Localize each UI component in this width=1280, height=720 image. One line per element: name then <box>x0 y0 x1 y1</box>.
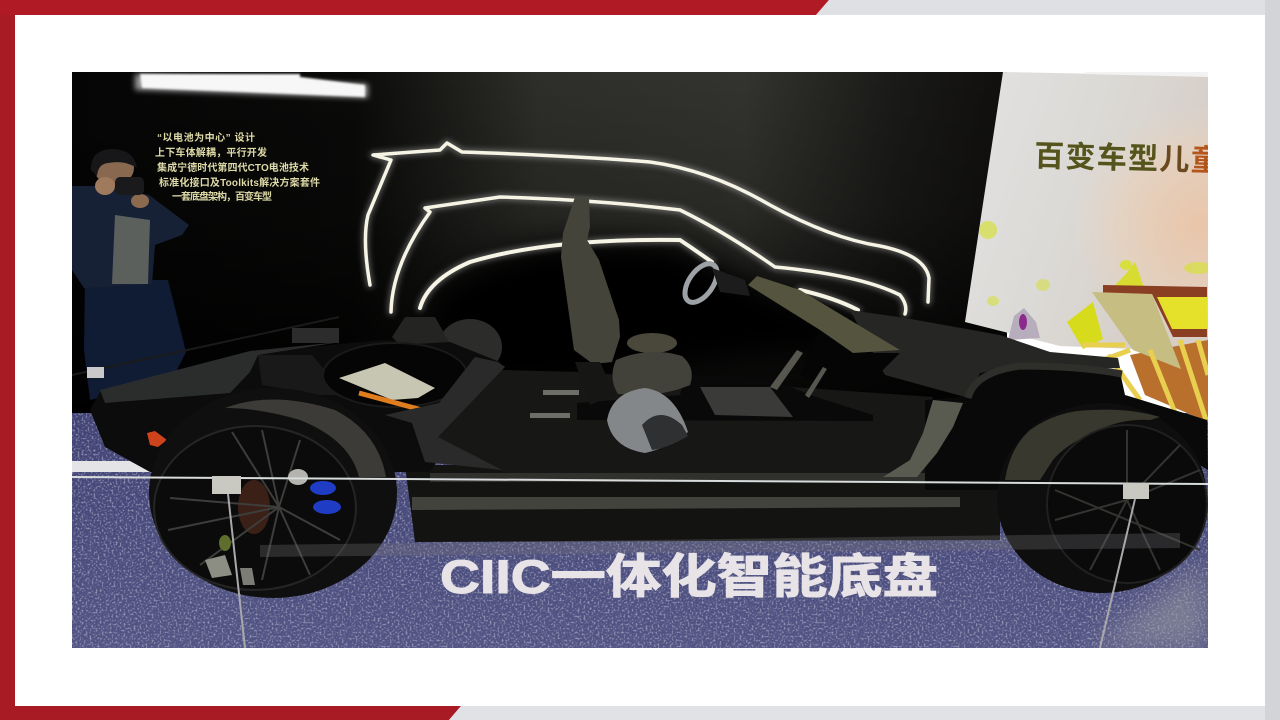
pedal brackets <box>770 350 827 398</box>
far rear wheel <box>443 319 502 361</box>
rim <box>1047 425 1207 583</box>
fender top <box>968 366 1122 398</box>
wall shading <box>360 190 1007 400</box>
spokes <box>168 430 340 580</box>
exhibition back wall <box>72 72 1007 422</box>
tyre <box>997 403 1207 593</box>
grey side trim <box>883 400 963 477</box>
floor mat <box>438 370 933 473</box>
seat back <box>561 197 620 364</box>
wall caption: 一套底盘架构，百变车型 <box>172 190 272 203</box>
white floor strip <box>72 461 152 472</box>
glass clamp left <box>212 476 241 494</box>
helmet <box>607 388 688 453</box>
dashboard <box>748 276 900 353</box>
side rail highlight <box>412 497 960 510</box>
banner paint splashes <box>979 221 1212 349</box>
seat cushion rear <box>627 333 677 353</box>
frame: right grey bar <box>1265 0 1280 720</box>
front wheel arch <box>940 365 1208 480</box>
tyre <box>149 388 397 598</box>
legs <box>84 280 186 400</box>
hands <box>95 177 115 195</box>
painting canvas <box>1157 297 1207 329</box>
rear wheel <box>149 388 397 598</box>
steering wheel <box>679 258 750 308</box>
floor tray base <box>577 375 873 421</box>
battery module <box>339 363 435 400</box>
front hood <box>850 310 1120 397</box>
banner peach glow <box>1106 137 1208 314</box>
easel board <box>1092 292 1181 369</box>
seat cushion <box>612 352 692 395</box>
wheel reflections <box>205 535 255 585</box>
front wheel <box>997 403 1207 593</box>
dark area inside the sedan outline <box>442 230 820 370</box>
seat bracket <box>575 362 615 405</box>
jacket <box>72 186 189 288</box>
wall caption: “以电池为中心” 设计 <box>157 131 255 144</box>
painting frame <box>1103 285 1207 337</box>
shirt <box>112 215 150 284</box>
chassis <box>72 276 1208 542</box>
blue calipers <box>310 481 341 514</box>
seat rails <box>530 390 579 418</box>
rear deck <box>100 342 340 403</box>
orange cable <box>359 393 422 410</box>
dark underbody <box>405 465 1000 542</box>
wall caption: 上下车体解耦，平行开发 <box>155 146 267 159</box>
rear glass clamp <box>87 367 104 378</box>
silver hub <box>288 469 308 485</box>
photographer reflection <box>72 149 189 400</box>
tyre tread <box>225 399 386 477</box>
chassis title on glass: CIIC一体化智能底盘 <box>440 550 938 603</box>
banner top white edge <box>1085 72 1208 77</box>
glowing outline: sedan <box>420 240 858 310</box>
banner heading: 百变车型儿童 <box>1034 140 1222 178</box>
dashboard underside <box>800 330 900 390</box>
easel and painting <box>1082 285 1208 422</box>
brake disc <box>238 480 270 534</box>
glass clamp right <box>1123 483 1149 499</box>
easel legs <box>1082 340 1208 420</box>
wall caption: 标准化接口及Toolkits解决方案套件 <box>159 176 320 189</box>
glass barrier <box>72 476 1208 648</box>
tyre tread <box>1005 410 1160 480</box>
wall caption <box>155 131 320 203</box>
seat <box>561 197 692 405</box>
suspension tower <box>392 317 449 345</box>
rim <box>154 426 356 590</box>
shock hump <box>258 355 345 395</box>
frame: top grey bar <box>816 0 1280 15</box>
floor tray <box>700 387 793 417</box>
glowing outline: crossover <box>391 197 906 314</box>
photo: CIIC chassis exhibit <box>72 72 1280 648</box>
front black mass <box>925 385 1100 490</box>
wall caption: 集成宁德时代第四代CTO电池技术 <box>157 161 309 174</box>
rear reflector <box>147 431 167 447</box>
frame: bottom red bar <box>0 706 461 720</box>
spokes <box>1055 430 1200 570</box>
wheel bay <box>323 343 467 407</box>
frame plate <box>385 357 505 470</box>
side banner <box>965 72 1208 349</box>
banner purple splash <box>1008 308 1040 340</box>
glass reflection band <box>260 533 1180 557</box>
frame: top red bar <box>0 0 829 15</box>
lower sill <box>430 473 990 482</box>
rear box <box>292 328 339 343</box>
frame: left red bar <box>0 0 15 720</box>
rear body edge <box>72 317 339 375</box>
carpet floor <box>72 413 1208 648</box>
rear body <box>90 340 500 472</box>
frame: bottom grey bar <box>449 706 1280 720</box>
glowing outline: SUV <box>365 143 929 302</box>
head <box>96 162 134 185</box>
light strip on ceiling <box>135 74 368 98</box>
camera <box>115 177 144 195</box>
orange backdrop under easel <box>1130 340 1208 422</box>
